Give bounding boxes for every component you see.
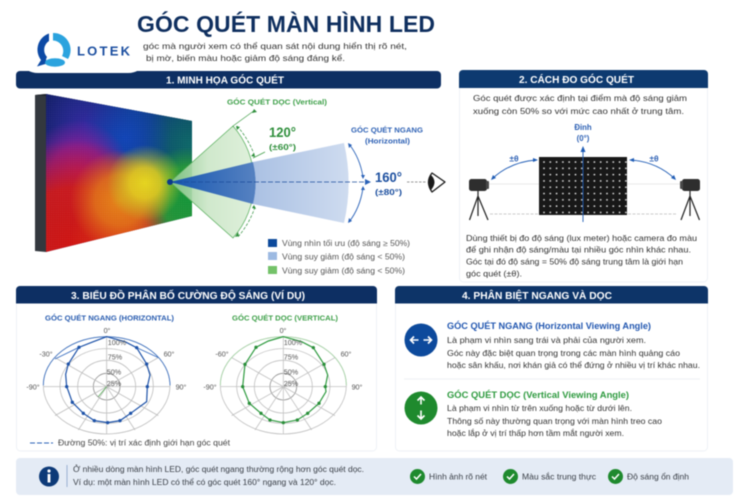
measuring diagram: ±θ [649,154,659,164]
chart: horizontal polar: 60° [164,350,175,358]
panel: section 4 horizontal vs vertical [395,286,708,451]
label: vertical angle: 120° [269,125,296,140]
logo [27,33,139,73]
horizontal viewing cone [167,143,371,223]
chart: vertical polar: 50% [284,368,299,376]
LED screen illustration [35,94,192,252]
legend: zones: Vùng suy giảm (độ sáng < 50%) [282,252,405,262]
logo: LOTEK [77,44,131,58]
chart: vertical polar: 60° [341,350,352,358]
icon: vertical arrows [404,392,438,424]
note text [73,465,364,487]
chart: horizontal polar: 0° [104,326,111,335]
icon: info [39,466,59,486]
section 4 header: 4. PHÂN BIỆT NGANG VÀ DỌC [462,289,612,302]
measuring diagram: ±θ [509,154,519,164]
vertical description: Là phạm vi nhìn từ trên xuống hoặc từ dưới lên. [447,403,632,413]
section 3 header: 3. BIỂU ĐỒ PHÂN BỐ CƯỜNG ĐỘ SÁNG (VÍ DỤ) [71,288,305,302]
icon: eye [407,173,445,192]
subtitle text: bị mờ, biến màu hoặc giảm độ sáng đáng kể. [146,53,345,63]
chart: vertical polar: 100% [284,338,303,347]
legend: zones: Vùng nhìn tối ưu (độ sáng ≥ 50%) [282,239,410,248]
measuring diagram: Đỉnh [574,123,592,132]
vertical description: GÓC QUÉT DỌC (Vertical Viewing Angle) [447,389,629,400]
note text: Ví dụ: một màn hình LED có thể có góc quét 160° ngang và 120° dọc. [73,478,336,487]
chart: horizontal polar [26,314,187,434]
icon: right camera on tripod [680,179,700,220]
section 2 header [459,70,708,88]
legend: zones [268,239,410,276]
panel: section 1 header [16,71,441,88]
note text: Ở nhiều dòng màn hình LED, góc quét ngang thường rộng hơn góc quét dọc. [73,465,364,474]
legend: 50% line: Đường 50%: vị trí xác định giới hạn góc quét [58,438,231,448]
label: horizontal angle: 160° [375,170,402,185]
check: sharp image: Hình ảnh rõ nét [429,472,488,482]
title: GÓC QUÉT MÀN HÌNH LED [137,10,435,37]
check: true colours [503,469,596,484]
chart: horizontal polar: 50% [107,368,122,376]
icon: left camera on tripod [469,179,489,220]
method text: Góc tại đó độ sáng = 50% độ sáng trung tâm là giới hạn [466,256,683,266]
measuring diagram: (0°) [577,134,590,143]
chart: vertical polar: 0° [280,326,287,335]
label: horizontal angle: (±80°) [375,187,402,197]
subtitle text [143,41,407,63]
chart: horizontal polar: 100% [108,338,127,347]
intro text: Góc quét được xác định tại điểm mà độ sáng giảm [473,93,687,103]
section 2 header: 2. CÁCH ĐO GÓC QUÉT [519,73,634,86]
label: horizontal angle [351,126,423,197]
chart: vertical polar: GÓC QUÉT DỌC (VERTICAL) [232,314,339,322]
intro text [473,93,687,116]
chart: horizontal polar: 90° [176,382,187,392]
intro text: xuống còn 50% so với mức cao nhất ở trung tâm. [473,106,684,116]
section 4 header [395,286,708,304]
method text: Dùng thiết bị đo độ sáng (lux meter) hoặc camera đo màu [466,233,697,243]
panel: section 1 header: 1. MINH HỌA GÓC QUÉT [166,74,284,86]
check: sharp image [410,469,488,484]
horizontal description: GÓC QUÉT NGANG (Horizontal Viewing Angle) [447,320,651,331]
chart: horizontal polar: 75% [108,352,123,362]
horizontal description [447,320,700,370]
method text [466,233,697,278]
section 3 header [16,286,377,304]
chart: vertical polar: -60° [215,350,229,358]
label: horizontal angle: (Horizontal) [365,136,410,146]
label: vertical angle: GÓC QUÉT DỌC (Vertical) [227,98,327,106]
chart: vertical polar [203,314,363,434]
panel: section 3 intensity charts [16,286,377,451]
chart: horizontal polar: -90° [26,382,40,392]
check: true colours: Màu sắc trung thực [522,472,596,482]
label: horizontal angle: GÓC QUÉT NGANG [351,126,423,134]
measuring diagram [469,123,700,222]
chart: vertical polar: -90° [203,382,217,392]
panel: bottom note bar [16,458,733,495]
method text: để ghi nhận độ sáng/màu tại nhiều góc nhìn khác nhau. [466,244,691,254]
label: vertical angle [227,98,327,152]
chart: horizontal polar: -30° [39,350,53,358]
vertical viewing cone [170,109,265,238]
horizontal description: Là phạm vi nhìn sang trái và phải của người xem. [447,335,646,345]
vertical description [447,389,662,438]
legend: zones: Vùng suy giảm (độ sáng < 50%) [282,266,405,276]
panel: section 2 how to measure [459,70,708,282]
chart: vertical polar: 75% [284,352,299,362]
chart: horizontal polar: 25% [107,379,122,388]
label: vertical angle: (±60°) [269,142,296,152]
method text: góc quét (±θ). [466,268,522,278]
vertical description: hoặc lắp ở vị trí thấp hơn tầm mắt người xem. [447,428,624,438]
check: stable brightness: Độ sáng ổn định [627,472,689,482]
check: stable brightness [608,469,689,484]
chart: vertical polar: 90° [352,382,363,392]
chart: vertical polar: 25% [284,379,299,388]
horizontal description: hoặc sân khấu, nơi khán giả có thể đứng ở nhiều vị trí khác nhau. [447,360,700,370]
chart: horizontal polar: GÓC QUÉT NGANG (HORIZONTAL) [45,314,175,322]
subtitle text: góc mà người xem có thể quan sát nội dung hiển thị rõ nét, [143,41,407,51]
vertical description: Thông số này thường quan trọng với màn hình treo cao [447,416,662,426]
icon: horizontal arrows [404,324,438,356]
horizontal description: Góc này đặc biệt quan trọng trong các màn hình quảng cáo [447,348,680,358]
